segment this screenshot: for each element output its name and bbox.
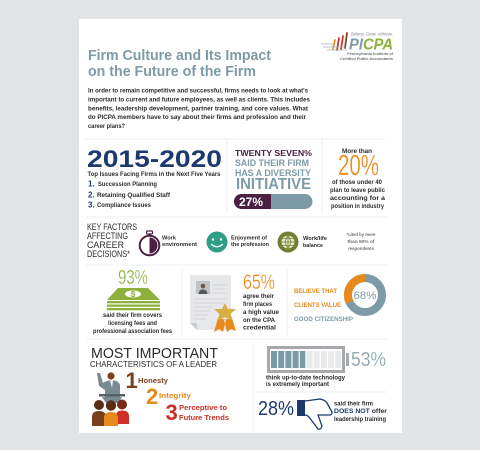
icon: speaker and audience [92, 372, 129, 426]
heading: 2015-2020: 2015-2020 [87, 146, 222, 173]
logo: PICPA: Belong. Grow. Achieve. [351, 32, 393, 36]
list of issues: 2. [88, 190, 95, 200]
panel: 65% CPA credential [243, 271, 279, 332]
logo: PICPA: Certified Public Accountants [340, 56, 393, 61]
label: work environment: Work [162, 236, 176, 242]
label: work/life balance: balance [303, 243, 323, 249]
heading: key factors: CAREER [87, 240, 124, 251]
label: work/life balance: Work/life [303, 236, 327, 242]
intro text [88, 88, 310, 130]
icon: smiley [206, 232, 228, 252]
caption: DOES NOT offer [334, 408, 388, 415]
panel: key factors [87, 222, 376, 260]
footnote: respondents [348, 246, 375, 251]
text: believe that clients value good citizenship: CLIENTS VALUE [294, 302, 341, 309]
rank 1: honesty [126, 368, 169, 393]
caption: firm places [243, 301, 272, 308]
panel: 20% leave public accounting: More than [342, 148, 372, 155]
heading: key factors: AFFECTING [87, 231, 128, 242]
footnote [346, 232, 376, 251]
panel: 2015-2020 top issues [87, 146, 222, 210]
rank 1: honesty: Honesty [138, 376, 169, 385]
caption [334, 400, 388, 423]
heading: CHARACTERISTICS OF A LEADER [90, 360, 217, 369]
footnote: *cited by more [346, 232, 376, 237]
label: enjoyment of the profession: the profession [231, 242, 269, 248]
icon: thumbs down [297, 399, 332, 429]
stat: 93%: 93% [118, 267, 148, 289]
panel: 20% leave public accounting: accounting for a [330, 195, 386, 202]
list of issues: 1. [88, 180, 95, 188]
donut chart 68%: 68% [354, 290, 377, 302]
panel: leadership training 28% [258, 398, 388, 429]
intro text: In order to remain competitive and successful, firms needs to look at what's [88, 88, 308, 94]
panel: 20% leave public accounting [330, 148, 386, 210]
caption: on the CPA [243, 317, 275, 324]
stat: 53%: 53% [351, 349, 386, 371]
footnote: than 50% of [348, 239, 375, 244]
text: believe that clients value good citizenship [294, 288, 353, 323]
icon: battery [267, 346, 349, 373]
caption: agree their [243, 293, 275, 300]
label: enjoyment of the profession [231, 236, 269, 248]
intro text: important to current and future employees, as well as clients. This includes [88, 96, 310, 104]
logo: PICPA: PICPA [349, 36, 393, 54]
stat: 28%: 28% [258, 398, 294, 420]
heading: MOST IMPORTANT [91, 345, 218, 362]
list of issues: Succession Planning [98, 181, 157, 188]
stat: 65%: 65% [243, 271, 275, 294]
icon: money stack: $ [131, 290, 136, 299]
intro text: do PICPA members have to say about their firms and profession and their [88, 114, 306, 121]
rank 2: integrity [146, 384, 192, 409]
icon: globe [278, 232, 298, 252]
list of issues: Retaining Qualified Staff [97, 192, 171, 199]
progress bar 27%: 27% [239, 197, 263, 209]
rank 3: perceptive to future trends [166, 400, 229, 425]
caption [93, 313, 173, 335]
subheading: top issues: Top Issues Facing Firms in the Next Five Years [88, 172, 221, 178]
caption [266, 374, 346, 388]
rank 3: perceptive to future trends: Perceptive to [179, 403, 227, 412]
heading: key factors: DECISIONS* [87, 249, 130, 260]
caption: said their firm [334, 400, 373, 408]
intro text: benefits, leadership development, partner training, and core values. What [88, 105, 309, 112]
panel: 20% leave public accounting: of those under 40 [332, 179, 382, 186]
title: Firm Culture and Its Impact [88, 48, 271, 64]
text: believe that clients value good citizenship: BELIEVE THAT [294, 288, 337, 295]
rank 2: integrity: Integrity [159, 391, 192, 400]
diversity text: HAS A DIVERSITY [235, 168, 311, 178]
label: work environment [162, 236, 197, 248]
logo: PICPA: Pennsylvania Institute of [347, 51, 394, 56]
panel: clients value good citizenship [294, 278, 382, 323]
panel: 20% leave public accounting: 20% [338, 150, 379, 182]
rank 3: perceptive to future trends: 3 [166, 400, 178, 425]
title: on the Future of the Firm [88, 64, 256, 80]
label: work environment: environment [162, 242, 197, 248]
logo: PICPA [321, 32, 394, 61]
heading: key factors: KEY FACTORS [87, 222, 137, 233]
icon: stopwatch [140, 231, 159, 255]
panel: 20% leave public accounting: plan to leave public [330, 187, 385, 194]
list of issues [88, 180, 171, 210]
label: enjoyment of the profession: Enjoyment of [231, 236, 267, 242]
caption: a high value [243, 309, 279, 316]
diversity text [235, 148, 312, 193]
panel: 20% leave public accounting: position in industry [331, 203, 384, 210]
list of issues: 3. [88, 200, 95, 210]
caption: is extremely important [266, 381, 329, 388]
caption: think up-to-date technology [266, 374, 346, 382]
rank 2: integrity: 2 [146, 384, 158, 409]
diversity text: SAID THEIR FIRM [235, 158, 309, 168]
caption: said their firm covers [103, 313, 163, 319]
panel: 93% fees [93, 267, 173, 335]
list of issues: Compliance Issues [97, 202, 151, 209]
caption: credential [243, 324, 276, 332]
title [88, 48, 271, 80]
rank 3: perceptive to future trends: Future Trends [179, 413, 229, 422]
rank 1: honesty: 1 [126, 368, 138, 393]
caption [243, 293, 279, 332]
diversity text: INITIATIVE [236, 176, 311, 193]
panel: most important characteristics [90, 345, 229, 426]
caption: licensing fees and [108, 321, 157, 327]
caption: leadership training [334, 416, 386, 423]
panel: technology 53% [266, 346, 386, 388]
heading [90, 345, 218, 369]
caption: professional association fees [93, 329, 173, 335]
heading: key factors [87, 222, 137, 260]
label: work/life balance [303, 236, 327, 249]
icon: CPA credential document [190, 275, 236, 332]
diversity text: TWENTY SEVEN% [235, 148, 312, 158]
text: believe that clients value good citizenship: GOOD CITIZENSHIP [294, 316, 353, 323]
panel: diversity initiative [234, 148, 312, 209]
intro text: career plans? [88, 123, 125, 130]
